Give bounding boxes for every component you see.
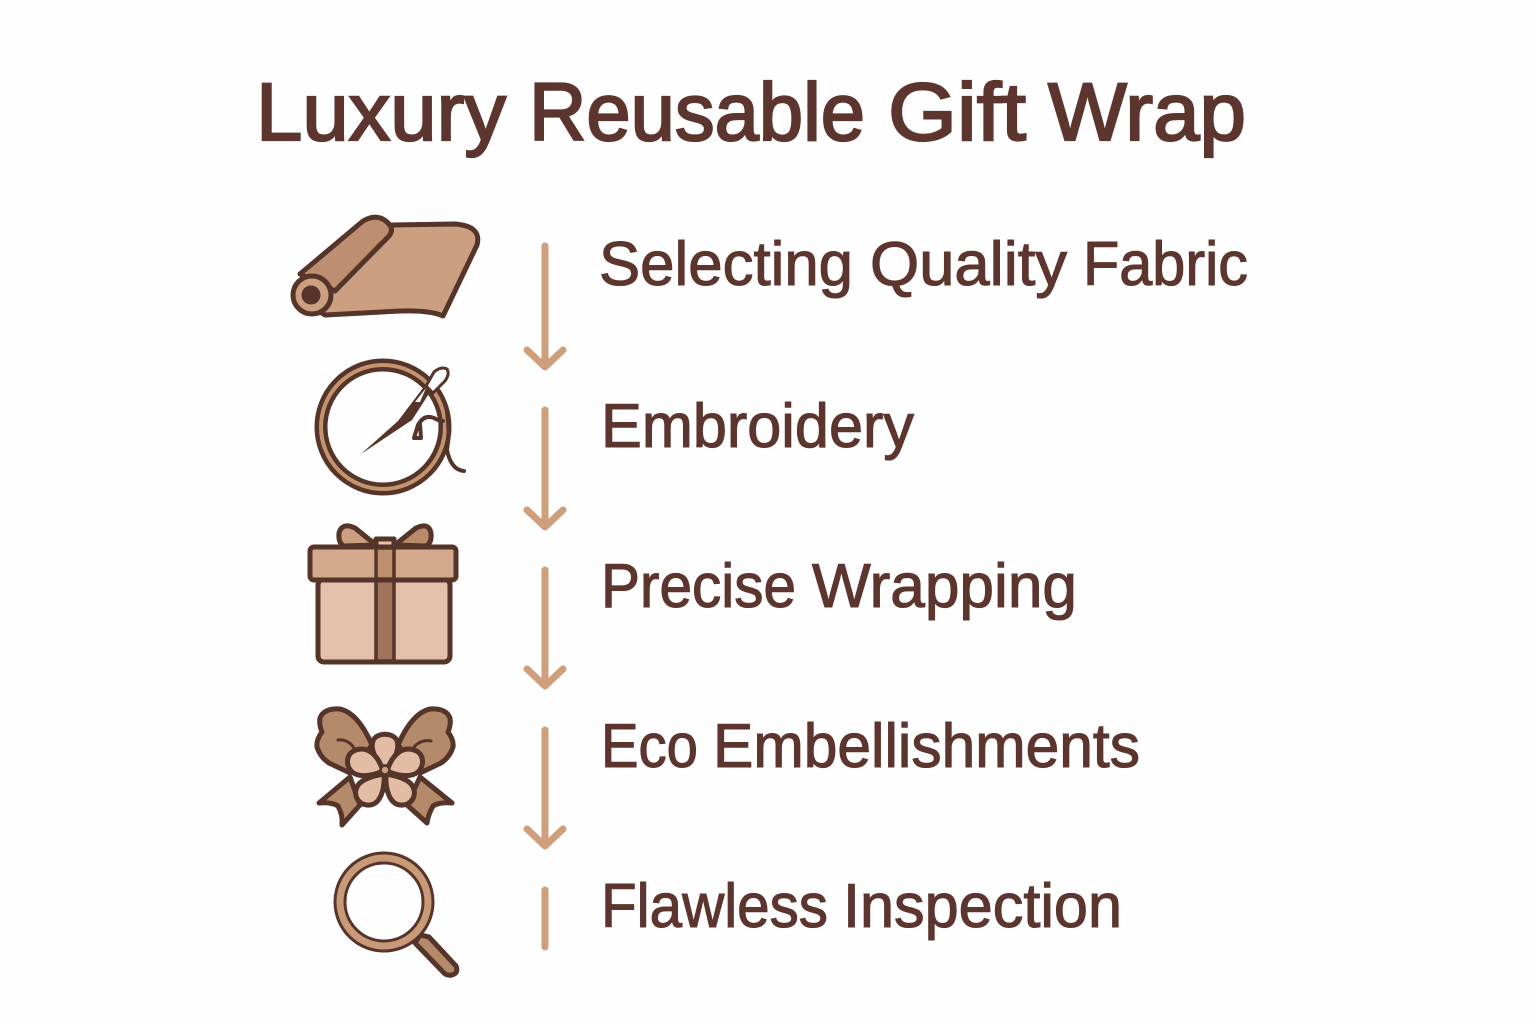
icon: magnifying glass: [340, 858, 457, 975]
text: step 3: Precise: [601, 552, 796, 621]
title: [256, 67, 1246, 158]
title: Reusable: [529, 67, 865, 158]
text: step 1: Quality: [870, 230, 1067, 299]
icon: fabric roll: [293, 217, 478, 316]
arrow 4: [527, 730, 563, 846]
icon: bow with flower: [317, 709, 453, 825]
text: step 4: Eco: [601, 712, 698, 781]
arrow 2: [527, 410, 563, 527]
connector line 5: [542, 890, 548, 947]
title: Gift: [888, 67, 1026, 158]
arrow 1: [527, 246, 563, 367]
text: step 3: [601, 552, 1077, 621]
text: step 4: Embellishments: [713, 712, 1140, 781]
icon: embroidery hoop and needle: [321, 365, 464, 489]
title: Wrap: [1048, 67, 1246, 158]
text: step 3: Wrapping: [812, 552, 1077, 621]
text: step 5: Flawless: [601, 872, 828, 941]
text: step 1: [599, 230, 1248, 299]
text: step 1: Fabric: [1083, 230, 1248, 299]
title: Luxury: [256, 67, 506, 158]
icon: gift box: [310, 526, 456, 662]
arrow 3: [527, 570, 563, 686]
text: step 5: [601, 872, 1122, 941]
text: step 2: Embroidery: [601, 392, 914, 461]
text: step 1: Selecting: [599, 230, 853, 299]
text: step 5: Inspection: [843, 872, 1122, 941]
